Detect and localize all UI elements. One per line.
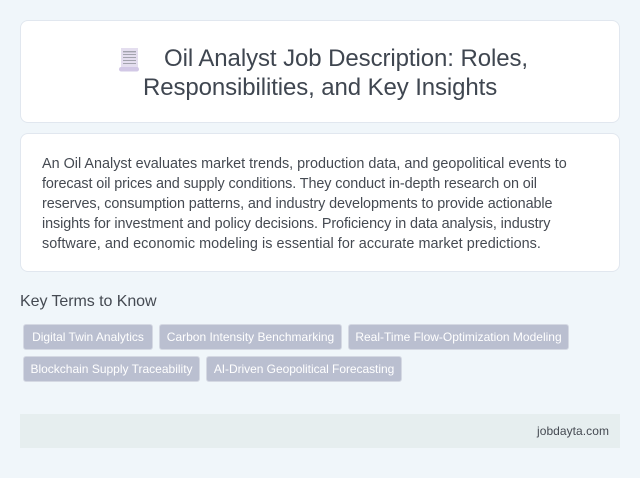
tag: Blockchain Supply Traceability	[30, 362, 193, 376]
tag	[23, 356, 200, 382]
description text: software, and economic modeling is essential for accurate market predictions.	[42, 236, 541, 252]
footer	[20, 414, 620, 448]
title: Oil Analyst Job Description: Roles,	[164, 45, 528, 72]
tag: Real-Time Flow-Optimization Modeling	[355, 330, 562, 344]
description text: An Oil Analyst evaluates market trends, production data, and geopolitical events to	[42, 156, 567, 172]
footer source: jobdayta.com	[537, 424, 609, 438]
description text: forecast oil prices and supply conditions. They conduct in-depth research on oil	[42, 176, 537, 192]
tag group	[23, 324, 569, 382]
description text: reserves, consumption patterns, and industry developments to provide actionable	[42, 196, 552, 212]
tag	[159, 324, 342, 350]
description text	[42, 156, 567, 252]
tag: Carbon Intensity Benchmarking	[167, 330, 334, 344]
tag	[348, 324, 569, 350]
tag: AI-Driven Geopolitical Forecasting	[214, 362, 394, 376]
tag	[23, 324, 153, 350]
title: Responsibilities, and Key Insights	[143, 74, 497, 101]
panel: description	[20, 133, 620, 272]
tag: Digital Twin Analytics	[32, 330, 144, 344]
panel: title card	[20, 20, 620, 123]
tag	[206, 356, 402, 382]
title	[143, 45, 528, 101]
description text: insights for investment and policy decisions. Proficiency in data analysis, industry	[42, 216, 550, 232]
icon: receipt document	[119, 48, 139, 72]
heading: key terms: Key Terms to Know	[20, 293, 157, 310]
